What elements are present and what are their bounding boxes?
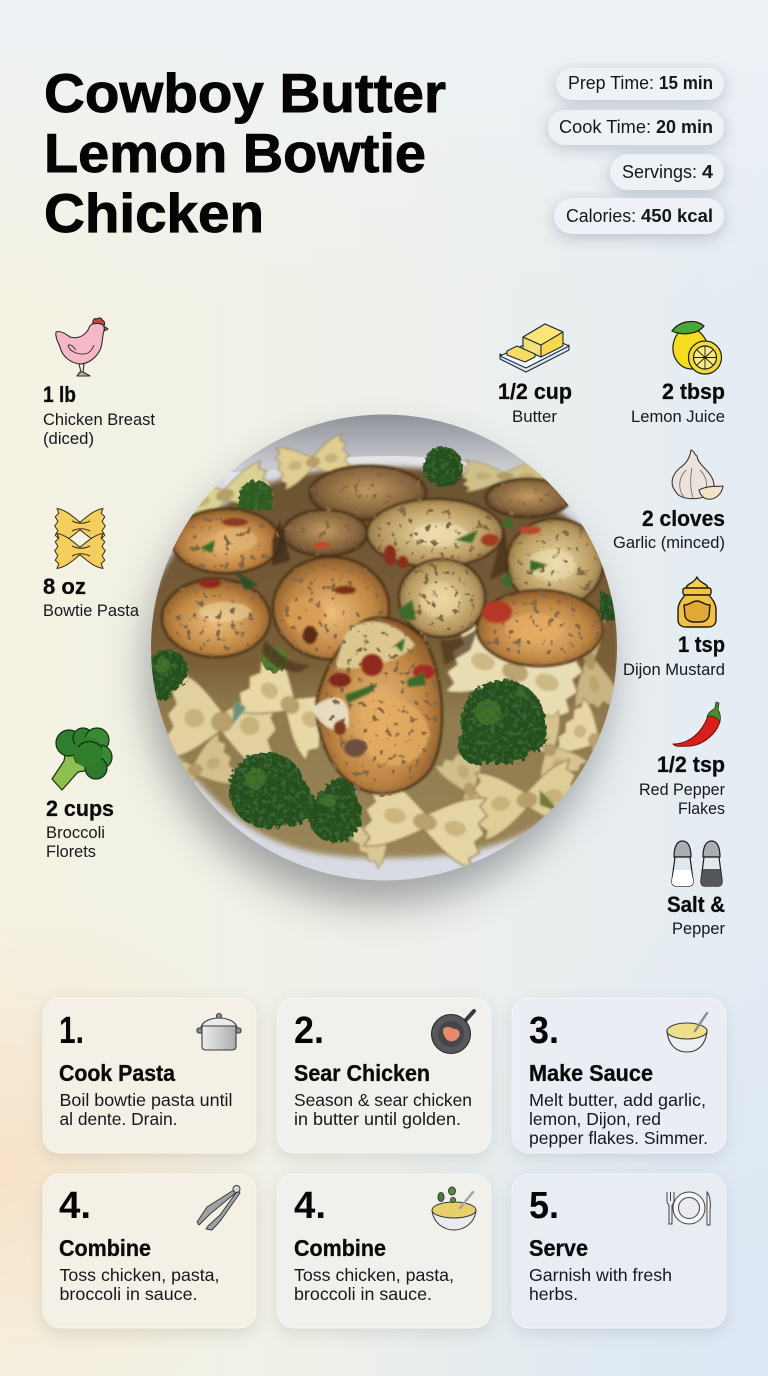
icon: bowtie pasta: [55, 509, 105, 568]
step card 4: combine: [43, 1174, 256, 1333]
ingredient: red pepper flakes: Flakes: [678, 800, 725, 818]
pill: prep time: [556, 68, 724, 104]
icon: sauce bowl: [667, 1013, 707, 1052]
step card 3: make sauce: Make Sauce: [529, 1060, 653, 1086]
broccoli: [148, 447, 548, 842]
step card 2: sear chicken: in butter until golden.: [294, 1109, 461, 1129]
ingredient: lemon juice: Lemon Juice: [631, 408, 725, 426]
pill: cook time: Cook Time:: [559, 117, 651, 137]
icon: chili pepper: [673, 702, 720, 746]
ingredient: broccoli florets: Broccoli: [46, 824, 105, 842]
pill: cook time: 20 min: [656, 117, 713, 137]
ingredient: garlic: [613, 450, 725, 552]
pill: calories: Calories:: [566, 206, 636, 226]
red pepper bits and herbs: [199, 518, 541, 757]
icon: tongs: [197, 1186, 240, 1230]
icon: mustard jar: [678, 577, 716, 627]
step card 4: combine: Combine: [59, 1235, 151, 1261]
ingredient: red pepper flakes: 1/2 tsp: [657, 752, 725, 777]
ingredient: garlic: 2 cloves: [642, 506, 725, 531]
ingredient: broccoli florets: [46, 728, 114, 861]
title: Chicken: [44, 182, 264, 244]
pill: servings: Servings:: [622, 162, 697, 182]
pill: servings: [610, 154, 724, 194]
step card 3: make sauce: 3.: [529, 1010, 559, 1052]
icon: butter on board: [500, 324, 569, 372]
ingredient: salt and pepper: Salt &: [667, 892, 725, 917]
step card 6: serve: [512, 1174, 726, 1333]
step card 2: sear chicken: Sear Chicken: [294, 1060, 430, 1086]
ingredient: bowtie pasta: 8 oz: [43, 574, 86, 599]
ingredient: salt and pepper: [667, 841, 725, 938]
step card 2: sear chicken: [277, 998, 491, 1158]
ingredient: broccoli florets: Florets: [46, 843, 96, 861]
icon: plate with fork and knife: [667, 1192, 710, 1225]
step card 5: combine: 4.: [294, 1185, 326, 1227]
sauce highlights: [199, 602, 251, 622]
title: [44, 62, 446, 244]
icon: broccoli: [52, 728, 112, 790]
step card 1: cook pasta: Boil bowtie pasta until: [60, 1090, 232, 1110]
step card 3: make sauce: [512, 998, 726, 1158]
recipe stats pills: [548, 68, 724, 238]
title: Lemon Bowtie: [44, 122, 426, 184]
ingredient: red pepper flakes: [639, 702, 725, 818]
ingredient: chicken breast: Chicken Breast: [43, 411, 155, 429]
ingredient: bowtie pasta: Bowtie Pasta: [43, 602, 140, 620]
ingredient: chicken breast: (diced): [43, 430, 94, 448]
food mass: [145, 467, 621, 858]
step card 1: cook pasta: al dente. Drain.: [60, 1109, 178, 1129]
step card 5: combine: broccoli in sauce.: [294, 1284, 432, 1304]
ingredient: salt and pepper: Pepper: [672, 920, 725, 938]
step card 5: combine: [277, 1174, 491, 1333]
pasta pieces: [273, 434, 353, 490]
ingredient: dijon mustard: [623, 577, 725, 679]
ingredient: chicken breast: 1 lb: [43, 382, 76, 407]
step card 3: make sauce: Melt butter, add garlic,: [529, 1090, 706, 1110]
crevice shadows: [272, 520, 290, 566]
ingredient: butter: [498, 324, 572, 426]
icon: garlic: [672, 450, 723, 499]
ingredient: broccoli florets: 2 cups: [46, 796, 114, 821]
food photo: chicken bowtie pasta in bowl: [145, 414, 640, 904]
step card 2: sear chicken: Season & sear chicken: [294, 1090, 472, 1110]
step card 6: serve: Garnish with fresh: [529, 1265, 672, 1285]
step card 6: serve: herbs.: [529, 1284, 578, 1304]
icon: lemon: [672, 322, 722, 374]
icon: chicken: [56, 318, 108, 376]
step card 4: combine: Toss chicken, pasta,: [60, 1265, 220, 1285]
pill: prep time: 15 min: [659, 73, 713, 93]
icon: bowl with herbs: [432, 1187, 476, 1230]
icon: pot: [197, 1014, 241, 1050]
step card 3: make sauce: pepper flakes. Simmer.: [529, 1128, 708, 1148]
ingredient: chicken breast: [43, 318, 155, 448]
ingredient: lemon juice: 2 tbsp: [662, 379, 725, 404]
chicken pieces: [310, 466, 426, 520]
step card 5: combine: Toss chicken, pasta,: [294, 1265, 454, 1285]
step card 1: cook pasta: Cook Pasta: [59, 1060, 175, 1086]
step card 2: sear chicken: 2.: [294, 1010, 324, 1052]
ingredient: butter: 1/2 cup: [498, 379, 572, 404]
title: Cowboy Butter: [44, 62, 446, 124]
step card 1: cook pasta: [43, 998, 256, 1158]
pill: cook time: [548, 110, 724, 148]
pill: prep time: Prep Time:: [568, 73, 654, 93]
step card 6: serve: 5.: [529, 1185, 559, 1227]
ingredient: garlic: Garlic (minced): [613, 534, 725, 552]
step card 4: combine: 4.: [59, 1185, 91, 1227]
ingredient: butter: Butter: [512, 408, 558, 426]
ingredient: dijon mustard: Dijon Mustard: [623, 661, 725, 679]
step card 5: combine: Combine: [294, 1235, 386, 1261]
pill: servings: 4: [702, 162, 713, 182]
step card 3: make sauce: lemon, Dijon, red: [529, 1109, 661, 1129]
step card 1: cook pasta: 1.: [59, 1010, 84, 1052]
pill: calories: [554, 198, 724, 238]
pill: calories: 450 kcal: [641, 206, 713, 226]
icon: frying pan: [432, 1011, 474, 1054]
ingredient: bowtie pasta: [43, 509, 140, 620]
step card 6: serve: Serve: [529, 1235, 588, 1261]
ingredient: red pepper flakes: Red Pepper: [639, 781, 725, 799]
ingredient: lemon juice: [631, 322, 725, 426]
icon: salt and pepper shakers: [672, 841, 722, 886]
ingredient: dijon mustard: 1 tsp: [678, 632, 725, 657]
step card 4: combine: broccoli in sauce.: [60, 1284, 198, 1304]
